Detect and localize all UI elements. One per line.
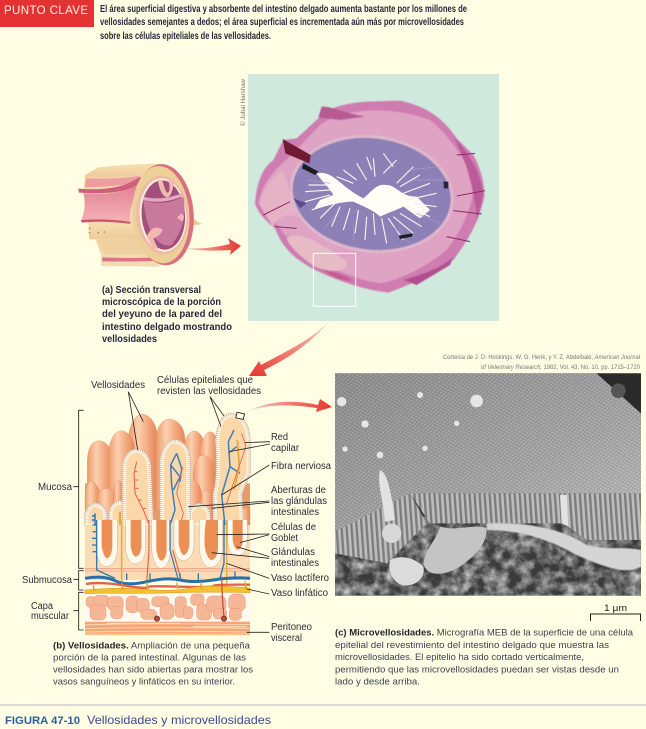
caption a: microscópica de la porción <box>102 297 221 308</box>
caption b <box>53 640 253 688</box>
lymph vessel band <box>85 581 250 594</box>
photo credit: of Veterinary Research, 1982, Vol. 43, No. 10, pp. 1715–1720 <box>481 365 641 371</box>
villi labels: Glándulas <box>271 547 315 558</box>
villi labels: Submucosa <box>22 575 72 586</box>
caption c: lado y desde arriba. <box>335 676 420 688</box>
caption b: porción de la pared intestinal. Algunas de las <box>53 652 246 664</box>
illustration: small intestine tube section <box>78 162 202 267</box>
caption b: (b) Vellosidades. Ampliación de una pequeña <box>53 640 251 652</box>
villi labels: capilar <box>271 443 300 454</box>
key point text: vellosidades semejantes a dedos; el área superficial es incrementada aún más por microvellosidades <box>100 17 464 28</box>
villi labels: intestinales <box>271 558 319 569</box>
villi labels: Vaso lactífero <box>271 573 329 584</box>
intestinal glands <box>85 520 250 580</box>
caption a: vellosidades <box>102 334 157 345</box>
villi labels: Capa <box>31 601 53 612</box>
caption a: (a) Sección transversal <box>102 285 201 296</box>
villi labels: Vaso linfático <box>271 588 328 599</box>
villi labels: Células de <box>271 522 316 533</box>
villi labels: Peritoneo <box>271 622 312 633</box>
arrow: section to villi <box>249 319 331 376</box>
villi labels: Red <box>271 432 288 443</box>
key point text <box>100 4 467 42</box>
leader lines and brackets <box>73 392 270 632</box>
caption a: del yeyuno de la pared del <box>102 309 222 320</box>
caption b: vellosidades han sido abiertas para mostrar los <box>53 664 253 676</box>
key point badge: PUNTO CLAVE <box>4 5 88 17</box>
scale bar: 1 µm <box>604 603 627 614</box>
muscle layer <box>85 577 250 635</box>
arrow: tube to micrograph <box>183 238 241 255</box>
photo credit: Cortesía de J. D. Hoskings, W. G. Henk, y Y. Z. Abdelbaki, American Journal <box>443 355 641 361</box>
figure title: Vellosidades y microvellosidades <box>87 713 271 727</box>
villi labels: visceral <box>271 633 302 644</box>
caption c: (c) Microvellosidades. Micrografía MEB de la superficie de una célula <box>335 628 634 638</box>
vessels inside villi <box>92 430 246 525</box>
scale bar <box>590 603 640 621</box>
caption a <box>102 285 232 345</box>
caption a: intestino delgado mostrando <box>102 322 232 333</box>
vertical vessels and submucosa <box>85 520 250 588</box>
photo: microscopic cross section <box>248 74 499 321</box>
villi labels: muscular <box>31 611 70 622</box>
key point text: El área superficial digestiva y absorbente del intestino delgado aumenta bastante por los millones de <box>100 4 467 15</box>
micrograph: microvilli <box>335 373 641 596</box>
key point badge <box>0 0 94 27</box>
caption c: epitelial del revestimiento del intestino delgado que muestra las <box>335 640 609 651</box>
villi labels: Fibra nerviosa <box>271 461 331 472</box>
photo credit vertical: © Jubal Harshaw <box>239 79 247 126</box>
villi labels: Mucosa <box>38 482 72 493</box>
caption c: permitiendo que las microvellosidades puedan ser vistas desde un <box>335 664 619 676</box>
arrow: villi to micrograph <box>249 399 332 412</box>
caption c <box>335 628 634 688</box>
photo credit <box>443 355 641 371</box>
key point text: sobre las células epiteliales de las vellosidades. <box>100 31 271 42</box>
villi labels <box>22 375 331 644</box>
caption c: microvellosidades. El epitelio ha sido cortado verticalmente, <box>335 652 584 663</box>
villi labels: Goblet <box>271 533 298 544</box>
villi labels: Aberturas de <box>271 485 326 496</box>
villi labels: las glándulas <box>271 496 327 507</box>
illustration: villi cross section <box>85 414 250 635</box>
caption b: vasos sanguíneos y linfáticos en su interior. <box>53 676 235 688</box>
figure title: FIGURA 47-10 <box>5 715 80 727</box>
villi labels: Células epiteliales que <box>157 375 253 386</box>
villi labels: revisten las vellosidades <box>157 386 261 397</box>
figure title <box>0 704 646 727</box>
villi labels: intestinales <box>271 507 319 518</box>
villi labels: Vellosidades <box>91 380 145 391</box>
